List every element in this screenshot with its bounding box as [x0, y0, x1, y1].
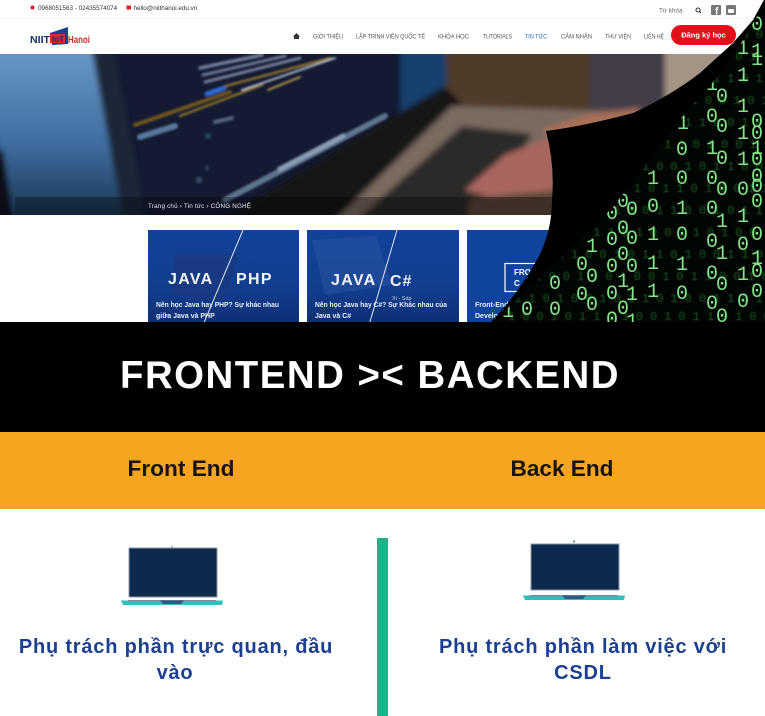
title band: [0, 322, 765, 432]
bright digits: 0111110100100101011010000000101100000001100100101001100000011000100000001001: [502, 14, 763, 334]
text: back end description: Phụ trách phần làm việc với: [439, 636, 727, 658]
text: front end description: Phụ trách phần trực quan, đầu: [19, 636, 333, 658]
keyboard deck: [334, 101, 606, 215]
menu items: LIÊN HỆ: [644, 32, 664, 40]
heading: back end: Back End: [510, 456, 614, 481]
heading: front end: Front End: [128, 456, 234, 481]
card caption: Nên học Java hay C#? Sự Khác nhau của: [315, 302, 447, 309]
laptop bezel: [230, 87, 462, 215]
icon: facebook: f: [715, 6, 719, 18]
search keyword: [659, 8, 701, 14]
icon: facebook: [711, 5, 721, 18]
background room: [445, 40, 600, 125]
text: front end description: vào: [157, 662, 193, 684]
card label box: [505, 264, 555, 292]
menu items: LẬP TRÌNH VIÊN QUỐC TẾ: [356, 30, 425, 40]
diagonal divider: [203, 230, 243, 325]
email contact: hello@niithanoi.edu.vn: [134, 5, 198, 12]
card caption: Front-End: [475, 302, 508, 309]
menu items: THƯ VIỆN: [605, 32, 631, 40]
card label: JAVA: [331, 272, 377, 289]
logo: IoT: [52, 35, 64, 44]
phone contact: 0968051563 - 02435574074: [38, 5, 118, 12]
card caption: Nên học Java hay PHP? Sự khác nhau: [156, 302, 279, 309]
card caption: Java và C#: [315, 313, 351, 320]
card label: JAVA: [168, 271, 214, 288]
code lines: [135, 55, 335, 184]
article card: Java vs C#: [307, 230, 459, 325]
article card: Java vs C#: C#: [390, 273, 412, 290]
icon: youtube: [726, 5, 736, 15]
small label: Xi - Sáp: [392, 296, 412, 302]
icon: laptop, back end: [523, 540, 625, 600]
menu items: CẢM NHẬN: [561, 32, 592, 40]
article card: Front-End vs Back-End: FRO: [514, 268, 531, 277]
left blue backdrop: [0, 54, 123, 215]
article card: Java vs PHP: [148, 230, 299, 325]
website screenshot: top contact bar: [0, 0, 765, 19]
register button: [671, 25, 736, 45]
article card: Java vs PHP: PHP: [236, 271, 273, 288]
logo: NIIT: [30, 34, 51, 46]
menu items: KHÓA HỌC: [438, 32, 469, 40]
article card: Front-End vs Back-End: C: [514, 279, 520, 288]
logo: [30, 27, 90, 46]
page curl: black peel: [491, 0, 765, 322]
text: back end description: CSDL: [554, 662, 612, 684]
menu items: [313, 30, 664, 40]
hero photo: laptop with code on screen: [0, 54, 721, 215]
diagonal divider: [369, 230, 397, 325]
menu items: GIỚI THIỆU: [313, 32, 343, 40]
logo: Hanoi: [68, 35, 90, 46]
menu items: TUTORIALS: [483, 34, 512, 40]
divider: green vertical bar: [377, 538, 388, 716]
dock icons: [225, 116, 385, 200]
menu items: TIN TỨC: [525, 32, 547, 40]
icon: laptop, front end: [121, 546, 223, 605]
faint screen photo: [312, 236, 392, 295]
breadcrumb text: Trang chủ › Tin tức › CÔNG NGHỆ: [148, 201, 251, 210]
website screenshot: navigation: [0, 19, 765, 54]
breadcrumb strip: [15, 197, 555, 215]
binary code matrix revealed beneath the page: [504, 16, 765, 322]
title: FRONTEND >< BACKEND: [120, 354, 620, 397]
hand: [465, 130, 560, 197]
column header band: [0, 432, 765, 509]
faint laptop photo: [170, 254, 238, 293]
icon: home: [293, 33, 300, 39]
register button: Đăng ký học: [681, 30, 726, 40]
card caption: Develo: [475, 313, 498, 320]
article card: Front-End vs Back-End: [467, 230, 562, 322]
search keyword: Từ khóa: [659, 8, 683, 14]
card caption: giữa Java và PHP: [156, 313, 215, 320]
